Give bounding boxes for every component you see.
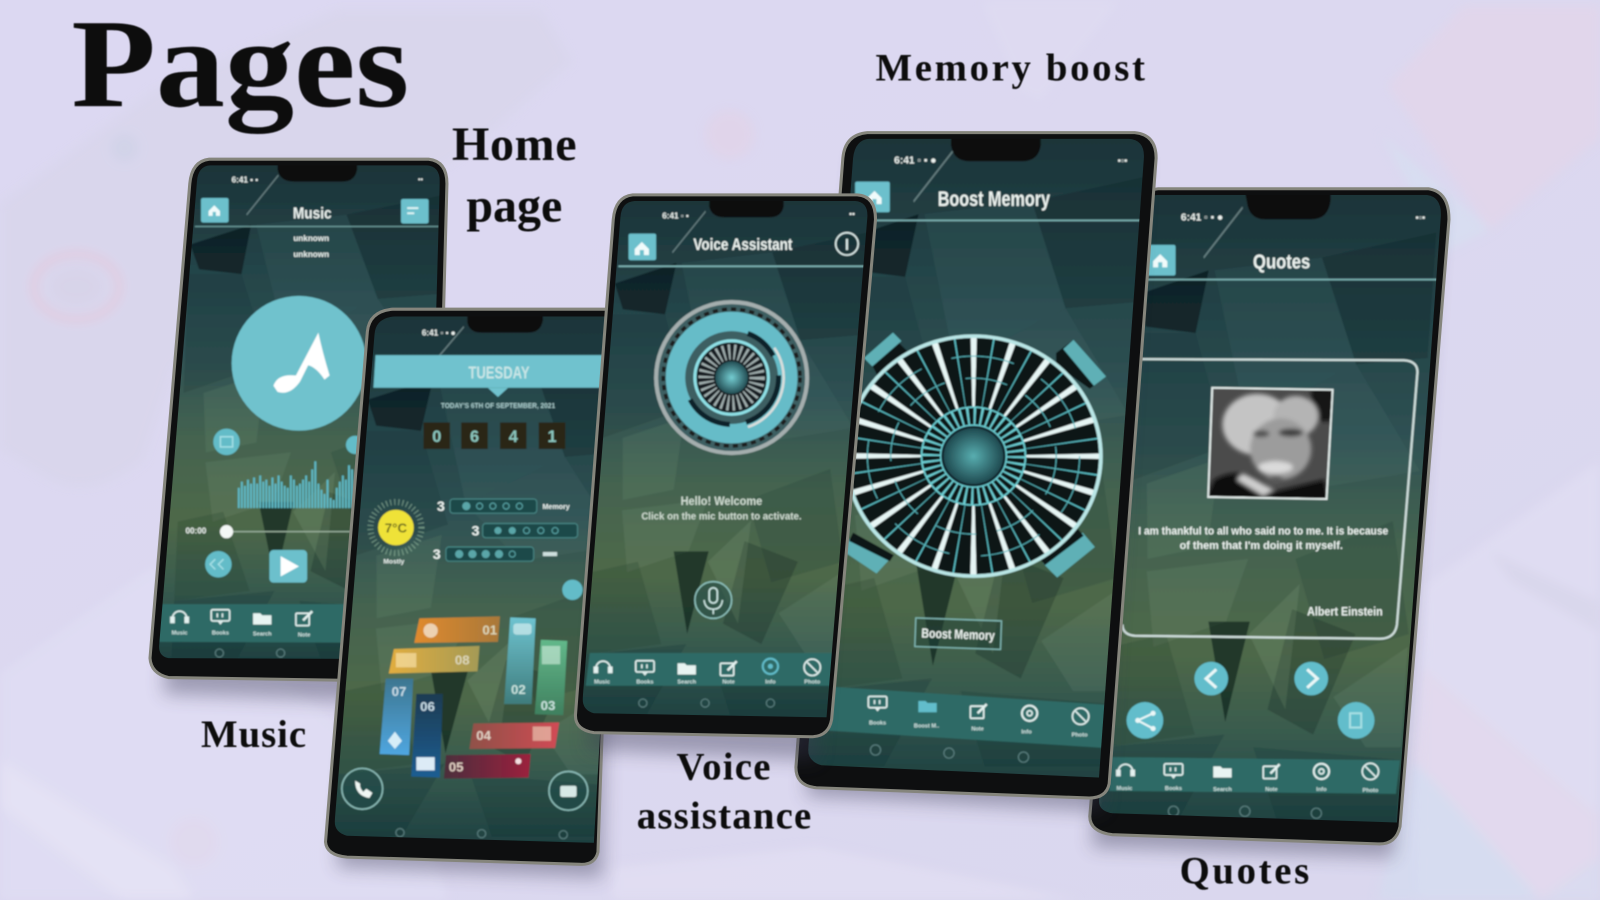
ribbon 02 xyxy=(504,617,536,704)
voice welcome text: Hello! Welcome xyxy=(681,495,763,508)
music playlist button xyxy=(401,199,429,223)
phone dial button xyxy=(342,768,383,809)
quotes status bar xyxy=(1181,212,1425,223)
ribbon 04 xyxy=(469,722,559,749)
status bar: memory: 3 xyxy=(437,499,445,515)
ribbon 07 xyxy=(380,679,413,755)
home status bar: 6:41 ▫ ▪ ● xyxy=(422,329,456,338)
ribbon 01: 01 xyxy=(482,623,497,638)
boost status bar xyxy=(894,155,1127,166)
music status bar xyxy=(232,176,423,185)
boost memory button: Boost Memory xyxy=(921,626,996,643)
voice status bar: ▪▪ xyxy=(849,209,855,218)
boost bottom navigation: Note xyxy=(971,727,984,733)
ribbon 08 xyxy=(389,646,480,673)
boost bottom navigation: Photo xyxy=(1072,733,1088,739)
label: Home page xyxy=(452,118,577,232)
clock digits: 6 xyxy=(470,428,479,446)
boost bottom navigation: Books xyxy=(869,720,886,726)
previous quote button xyxy=(1194,662,1228,695)
status bar: battery xyxy=(433,547,557,563)
music bottom navigation xyxy=(160,604,344,644)
clock digits: 4 xyxy=(509,428,518,446)
copy button xyxy=(1338,702,1374,739)
label: Quotes: Quotes xyxy=(1180,850,1309,893)
side button xyxy=(562,580,583,600)
music track labels: unknown xyxy=(293,234,329,243)
label: Voice assistance: assistance xyxy=(637,795,811,838)
day banner: Tuesday: TUESDAY xyxy=(468,363,530,383)
voice bottom navigation: Note xyxy=(722,680,735,686)
voice welcome text xyxy=(641,495,802,522)
weather sun: 7°C xyxy=(385,521,407,536)
ribbon 03 xyxy=(535,640,567,715)
ribbon 06: 06 xyxy=(420,699,435,714)
camera button xyxy=(549,771,588,810)
ribbon 06 xyxy=(411,694,443,778)
play button xyxy=(269,550,307,583)
phone: Home page xyxy=(326,309,639,878)
boost heading: Boost Memory xyxy=(938,187,1050,211)
status bar: storage: 3 xyxy=(472,524,480,540)
quote text xyxy=(1138,526,1388,552)
quotes bottom navigation: Search xyxy=(1213,787,1232,793)
voice heading: Voice Assistant xyxy=(693,236,793,254)
music home button xyxy=(201,198,229,222)
previous button xyxy=(205,551,232,578)
quotes notch xyxy=(1245,192,1331,219)
ribbon 01 xyxy=(414,616,500,643)
label: Home page: page xyxy=(466,179,562,232)
status bar: storage xyxy=(472,523,578,540)
voice notch xyxy=(709,200,784,217)
voice status bar xyxy=(662,209,855,220)
voice status bar: 6:41 ▫ ▪ xyxy=(662,211,689,220)
phone: Boost Memory xyxy=(796,133,1156,811)
quote text: I am thankful to all who said no to me. It is because xyxy=(1138,526,1388,538)
boost notch xyxy=(951,137,1041,161)
quotes bottom navigation: Info xyxy=(1316,787,1327,793)
quotes home button xyxy=(1148,244,1177,277)
portrait: Albert Einstein xyxy=(1204,386,1337,502)
quote text: of them that I'm doing it myself. xyxy=(1180,540,1343,552)
ribbon 05: 05 xyxy=(449,759,463,774)
boost bottom navigation: Info xyxy=(1021,730,1032,736)
boost status bar: 6:41 ▫ ▪ ● xyxy=(894,155,936,166)
ribbon menu xyxy=(380,616,567,779)
home notch xyxy=(467,314,543,333)
music heading: Music xyxy=(293,205,332,222)
voice home button xyxy=(629,234,656,260)
music track labels xyxy=(293,234,329,259)
faded phones and colour washes xyxy=(0,10,571,486)
music status bar: ▪▪ xyxy=(418,176,423,184)
progress slider: 00:00 xyxy=(185,527,207,536)
quotes bottom navigation: Note xyxy=(1265,787,1278,793)
boost memory button xyxy=(915,618,1001,649)
quotes status bar: 6:41 ▫ ▪ ● xyxy=(1181,212,1223,223)
ribbon 05 xyxy=(444,754,531,779)
status bar: memory xyxy=(437,499,570,515)
boost bottom navigation: Boost M.. xyxy=(914,724,940,730)
clock digits: 1 xyxy=(548,428,557,446)
music status bar: 6:41 ▪ ▪ xyxy=(232,176,258,185)
quote author: Albert Einstein xyxy=(1307,604,1383,618)
ribbon 08: 08 xyxy=(455,652,470,667)
boost bottom navigation xyxy=(829,687,1110,748)
quotes bottom navigation: Photo xyxy=(1362,788,1379,794)
voice bottom navigation xyxy=(586,653,855,686)
label: Voice assistance: Voice xyxy=(677,746,770,789)
label: Voice assistance xyxy=(637,746,811,838)
boost status bar: ▪▫▪ xyxy=(1118,155,1127,165)
day banner: Tuesday xyxy=(373,355,622,397)
music bottom navigation: Note xyxy=(298,633,310,639)
info icon xyxy=(836,233,858,255)
shuffle button xyxy=(213,429,240,455)
boost home button xyxy=(855,182,890,212)
mic button xyxy=(695,582,732,618)
wheel corner tabs xyxy=(843,337,1106,578)
label: Music: Music xyxy=(201,713,306,756)
equalizer xyxy=(239,461,352,508)
quotes bottom navigation: Music xyxy=(1117,786,1132,792)
label: Memory boost: Memory boost xyxy=(876,47,1145,90)
quote card xyxy=(1122,359,1417,639)
side button xyxy=(344,434,358,456)
next quote button xyxy=(1294,662,1328,695)
voice bottom navigation: Info xyxy=(765,680,776,686)
quotes bottom navigation xyxy=(1109,757,1400,794)
faint pink ring xyxy=(34,254,119,319)
music bottom navigation: Books xyxy=(212,631,229,637)
quotes heading: Quotes xyxy=(1253,251,1310,273)
weather sun xyxy=(370,502,421,565)
date line: TODAY'S 6TH OF SEPTEMBER, 2021 xyxy=(441,401,556,410)
memory wheel xyxy=(843,336,1106,578)
phone: Quotes xyxy=(1082,189,1449,857)
voice bottom navigation: Photo xyxy=(804,680,821,686)
voice bottom navigation: Music xyxy=(594,680,610,686)
share button xyxy=(1127,702,1163,739)
voice bottom navigation: Books xyxy=(636,680,653,686)
status bar: battery: 3 xyxy=(433,547,441,563)
music bottom navigation: Music xyxy=(172,631,188,637)
voice reactor ring xyxy=(656,302,807,453)
status bar: memory: Memory xyxy=(542,503,570,511)
clock digits: 0 xyxy=(432,428,441,446)
weather sun: Mostly xyxy=(383,558,405,565)
progress slider xyxy=(184,524,350,540)
music notch xyxy=(278,163,357,182)
ribbon 07: 07 xyxy=(392,684,406,699)
music bottom navigation: Search xyxy=(253,632,272,638)
phone: Music xyxy=(143,159,449,704)
music track labels: unknown xyxy=(293,250,329,259)
voice bottom navigation: Search xyxy=(677,680,697,686)
voice welcome text: Click on the mic button to activate. xyxy=(641,511,802,522)
ribbon 04: 04 xyxy=(476,728,492,743)
label: Home page: Home xyxy=(452,118,577,171)
ribbon 02: 02 xyxy=(511,682,526,697)
album circle with note icon xyxy=(232,296,366,431)
quotes status bar: ▪▫▪ xyxy=(1416,212,1425,222)
quotes bottom navigation: Books xyxy=(1165,786,1182,792)
phone: Voice Assistant xyxy=(571,195,878,760)
ribbon 03: 03 xyxy=(541,698,555,713)
clock digits xyxy=(423,422,565,449)
